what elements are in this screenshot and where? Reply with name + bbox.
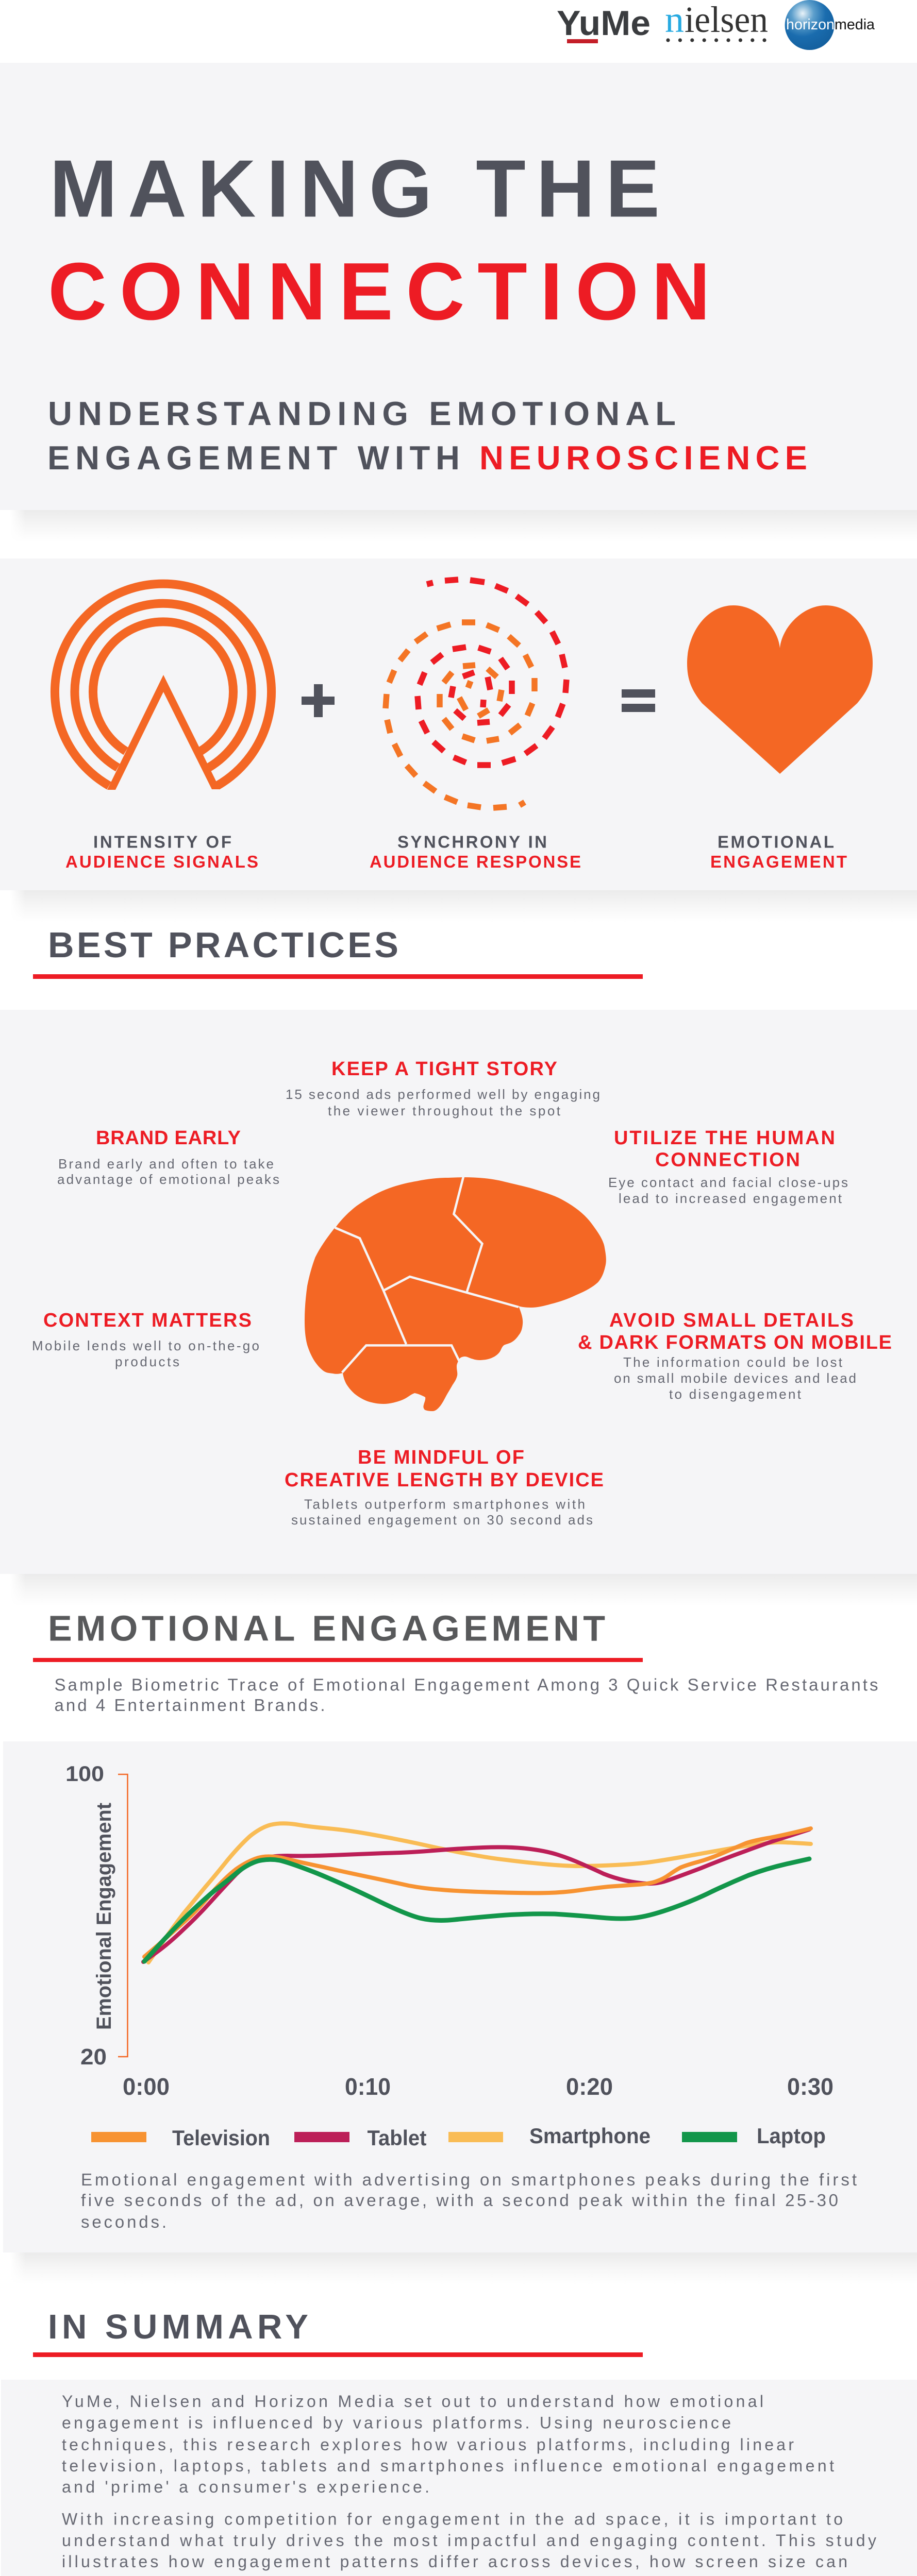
tip: avoid small details: to disengagement (669, 1386, 802, 1402)
heading: emotional engagement: EMOTIONAL ENGAGEMENT (48, 1608, 605, 1649)
tip: creative length by device (285, 1447, 604, 1528)
icon: plus (302, 684, 335, 717)
tip: avoid small details: & DARK FORMATS ON MOBILE (578, 1332, 892, 1353)
tip: utilize the human connection: lead to increased engagement (619, 1191, 842, 1206)
tip: avoid small details: on small mobile devices and lead (614, 1370, 856, 1386)
title: MAKING THE (49, 143, 660, 234)
tip: creative length by device: CREATIVE LENGTH BY DEVICE (285, 1469, 604, 1491)
tip: utilize the human connection: UTILIZE THE HUMAN (614, 1127, 835, 1149)
tip: creative length by device: Tablets outperform smartphones with (304, 1496, 585, 1512)
line: tablet (143, 1829, 809, 1962)
icon: audience signals arcs (55, 584, 272, 790)
logo: YuMe: YuMe (557, 4, 651, 43)
legend: Smartphone (529, 2124, 651, 2148)
label: emotional engagement: ENGAGEMENT (710, 852, 847, 871)
icon: brain (305, 1177, 606, 1411)
chart caption: five seconds of the ad, on average, with a second peak within the final 25-30 (81, 2191, 838, 2210)
label: intensity: INTENSITY OF (93, 833, 231, 851)
chart intro text: Sample Biometric Trace of Emotional Engagement Among 3 Quick Service Restaurants (55, 1675, 878, 1694)
tip: context matters: Mobile lends well to on-the-go (32, 1338, 259, 1353)
tip: creative length by device: sustained engagement on 30 second ads (291, 1512, 593, 1528)
summary paragraph 1: YuMe, Nielsen and Horizon Media set out to understand how emotional (62, 2392, 763, 2411)
heading: emotional engagement (33, 1608, 643, 1662)
chart caption (81, 2170, 857, 2231)
tip: keep a tight story: 15 second ads performed well by engaging (286, 1087, 600, 1102)
chart intro text (55, 1675, 878, 1715)
panel: best practices (0, 1010, 917, 1574)
tip: keep a tight story (286, 1058, 600, 1118)
tip: context matters: products (115, 1354, 179, 1369)
subtitle: UNDERSTANDING EMOTIONAL (48, 395, 676, 432)
tip: utilize the human connection: Eye contact and facial close-ups (608, 1175, 848, 1190)
tip: creative length by device: BE MINDFUL OF (358, 1447, 524, 1468)
tip: utilize the human connection: CONNECTION (655, 1149, 800, 1171)
line chart (143, 1823, 811, 1962)
title (48, 143, 710, 337)
summary paragraph 1: television, laptops, tablets and smartphones influence emotional engagement (62, 2456, 834, 2475)
x axis labels: 0:30 (787, 2073, 833, 2100)
label: intensity (65, 833, 258, 871)
panel: equation (0, 558, 917, 890)
tip: context matters: CONTEXT MATTERS (43, 1310, 252, 1331)
logo: Horizon Media (785, 0, 875, 50)
heading: in summary: IN SUMMARY (48, 2308, 308, 2346)
logo: Horizon Media: horizon (786, 16, 835, 33)
label: intensity: AUDIENCE SIGNALS (65, 852, 258, 871)
subtitle (47, 395, 807, 477)
legend: Television (172, 2126, 270, 2150)
y axis: 20 (80, 2044, 107, 2070)
heading: in summary (33, 2308, 643, 2357)
tip: brand early: advantage of emotional peaks (57, 1172, 279, 1187)
tip: avoid small details (578, 1310, 892, 1402)
tip: avoid small details: AVOID SMALL DETAILS (609, 1310, 854, 1331)
y axis: Emotional Engagement (93, 1803, 115, 2030)
subtitle: NEUROSCIENCE (479, 439, 807, 477)
icon: heart (687, 605, 873, 774)
label: synchrony: SYNCHRONY IN (397, 833, 547, 851)
x axis labels: 0:20 (566, 2073, 613, 2100)
legend: Laptop (757, 2124, 826, 2148)
heading: best practices: BEST PRACTICES (48, 925, 398, 965)
summary paragraph 2: illustrates how engagement patterns differ across devices, how screen size can (62, 2552, 847, 2571)
summary paragraph 2 (62, 2510, 882, 2576)
summary paragraph 2: With increasing competition for engagement in the ad space, it is important to (62, 2510, 843, 2529)
tip: keep a tight story: KEEP A TIGHT STORY (331, 1058, 557, 1080)
summary paragraph 1: engagement is influenced by various platforms. Using neuroscience (62, 2413, 731, 2432)
tip: context matters (32, 1310, 259, 1369)
icon: equals (622, 689, 655, 712)
tip: keep a tight story: the viewer throughout the spot (328, 1103, 561, 1118)
summary paragraph 1: techniques, this research explores how various platforms, including linear (62, 2435, 794, 2454)
summary paragraph 1 (62, 2392, 834, 2496)
panel: chart (3, 1741, 917, 2252)
chart caption: Emotional engagement with advertising on smartphones peaks during the first (81, 2170, 857, 2189)
line: television (144, 1828, 811, 1957)
tip: brand early (57, 1127, 279, 1187)
icon: synchrony spiral (386, 580, 566, 808)
logo: Horizon Media: media (835, 16, 875, 33)
tip: utilize the human connection (608, 1127, 848, 1206)
summary paragraph 2: understand what truly drives the most impactful and engaging content. This study (62, 2531, 876, 2550)
logo: Nielsen: n (665, 0, 684, 40)
label: synchrony: AUDIENCE RESPONSE (370, 852, 581, 871)
logos (557, 0, 875, 50)
subtitle: ENGAGEMENT WITH (47, 439, 460, 477)
summary paragraph 1: and 'prime' a consumer's experience. (62, 2478, 429, 2496)
tip: brand early: Brand early and often to take (58, 1156, 274, 1172)
line: laptop (144, 1859, 809, 1961)
chart caption: seconds. (81, 2212, 166, 2231)
legend: Tablet (367, 2126, 427, 2150)
logo: Nielsen: ielsen (685, 0, 768, 40)
heading: best practices (33, 925, 643, 979)
x axis labels: 0:10 (345, 2073, 391, 2100)
tip: avoid small details: The information could be lost (623, 1354, 843, 1370)
x axis labels: 0:00 (123, 2073, 170, 2100)
label: emotional engagement: EMOTIONAL (718, 833, 834, 851)
y axis: 100 (65, 1761, 104, 1786)
panel: title (0, 63, 917, 510)
legend (91, 2124, 826, 2150)
chart intro text: and 4 Entertainment Brands. (55, 1696, 325, 1715)
y axis (65, 1761, 128, 2070)
x axis labels (123, 2073, 833, 2100)
label: synchrony (370, 833, 581, 871)
tip: brand early: BRAND EARLY (96, 1127, 241, 1149)
line: smartphone (148, 1823, 811, 1962)
panel: summary (1, 2380, 917, 2576)
label: emotional engagement (710, 833, 847, 871)
title: CONNECTION (48, 246, 710, 337)
